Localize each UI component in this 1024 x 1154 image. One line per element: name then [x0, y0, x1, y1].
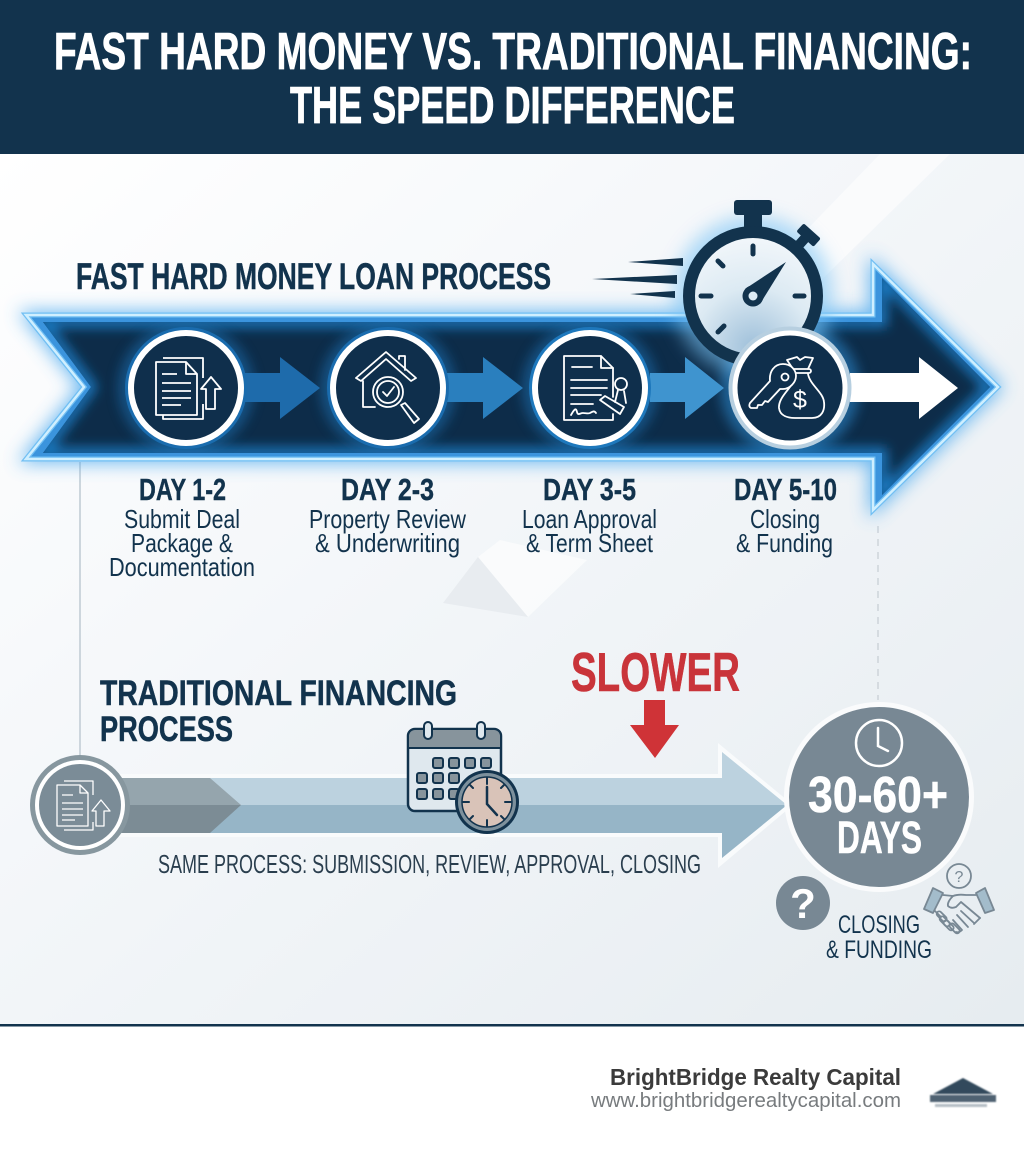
- step 4 icon: keys and money bag: [728, 326, 852, 450]
- step 1 text: DAY 1-2: [139, 472, 226, 507]
- connector lines: [80, 462, 878, 756]
- step 2 text: [309, 472, 466, 558]
- step 3 text: DAY 3-5: [543, 472, 636, 507]
- heading: traditional financing process: PROCESS: [100, 710, 233, 749]
- title: [54, 23, 972, 135]
- closing and funding label: [826, 911, 932, 964]
- handshake icon: [924, 864, 994, 934]
- step 1 text: [109, 472, 255, 582]
- question mark badge: [776, 876, 830, 930]
- step 1 text: Documentation: [109, 552, 255, 582]
- handshake icon: ?: [955, 869, 964, 886]
- caption: same process: SAME PROCESS: SUBMISSION, REVIEW, APPROVAL, CLOSING: [158, 849, 701, 879]
- 30-60+ days badge: [784, 702, 974, 892]
- step 2 icon: house inspection: [327, 327, 449, 449]
- step 4 icon: keys and money bag: $: [793, 386, 807, 414]
- fast process arrow: [26, 264, 998, 510]
- slower label: SLOWER: [571, 641, 740, 703]
- step 1 text: Submit Deal: [124, 504, 240, 534]
- 30-60+ days badge: 30-60+: [808, 766, 948, 823]
- step 3 icon: signed term sheet: [529, 327, 651, 449]
- calendar with clock icon: [408, 722, 519, 834]
- step 4 text: & Funding: [736, 528, 833, 558]
- step 4 text: DAY 5-10: [734, 472, 837, 507]
- step 3 text: [522, 472, 657, 558]
- step 4 text: Closing: [750, 504, 820, 534]
- header banner: [0, 0, 1024, 154]
- closing and funding label: CLOSING: [838, 911, 920, 939]
- clock icon: [856, 720, 902, 766]
- step 4 text: [734, 472, 837, 558]
- step 2 text: & Underwriting: [315, 528, 460, 558]
- title: THE SPEED DIFFERENCE: [290, 77, 735, 135]
- step 3 text: Loan Approval: [522, 504, 657, 534]
- step 3 text: & Term Sheet: [526, 528, 654, 558]
- website: www.brightbridgerealtycapital.com: [590, 1090, 901, 1112]
- closing and funding label: & FUNDING: [826, 936, 932, 964]
- heading: fast hard money loan process: FAST HARD MONEY LOAN PROCESS: [76, 256, 551, 297]
- step 2 text: DAY 2-3: [341, 472, 434, 507]
- 30-60+ days badge: DAYS: [837, 812, 922, 863]
- slower down arrow: [630, 700, 679, 758]
- background: [0, 154, 1024, 1024]
- stopwatch icon: [592, 200, 833, 376]
- step 1 text: Package &: [131, 528, 233, 558]
- heading: traditional financing process: TRADITIONAL FINANCING: [100, 674, 457, 713]
- question mark badge: ?: [790, 880, 816, 927]
- step 2 text: Property Review: [309, 504, 466, 534]
- heading: traditional financing process: [100, 674, 457, 749]
- step connector arrows: [245, 357, 958, 419]
- footer: [0, 1024, 1024, 1154]
- step 1 icon: documents upload: [125, 327, 247, 449]
- traditional process arrow: [100, 743, 793, 868]
- start icon: documents: [30, 755, 130, 855]
- logo: [930, 1078, 996, 1107]
- speed lines: [592, 258, 683, 298]
- company name: BrightBridge Realty Capital: [610, 1064, 901, 1090]
